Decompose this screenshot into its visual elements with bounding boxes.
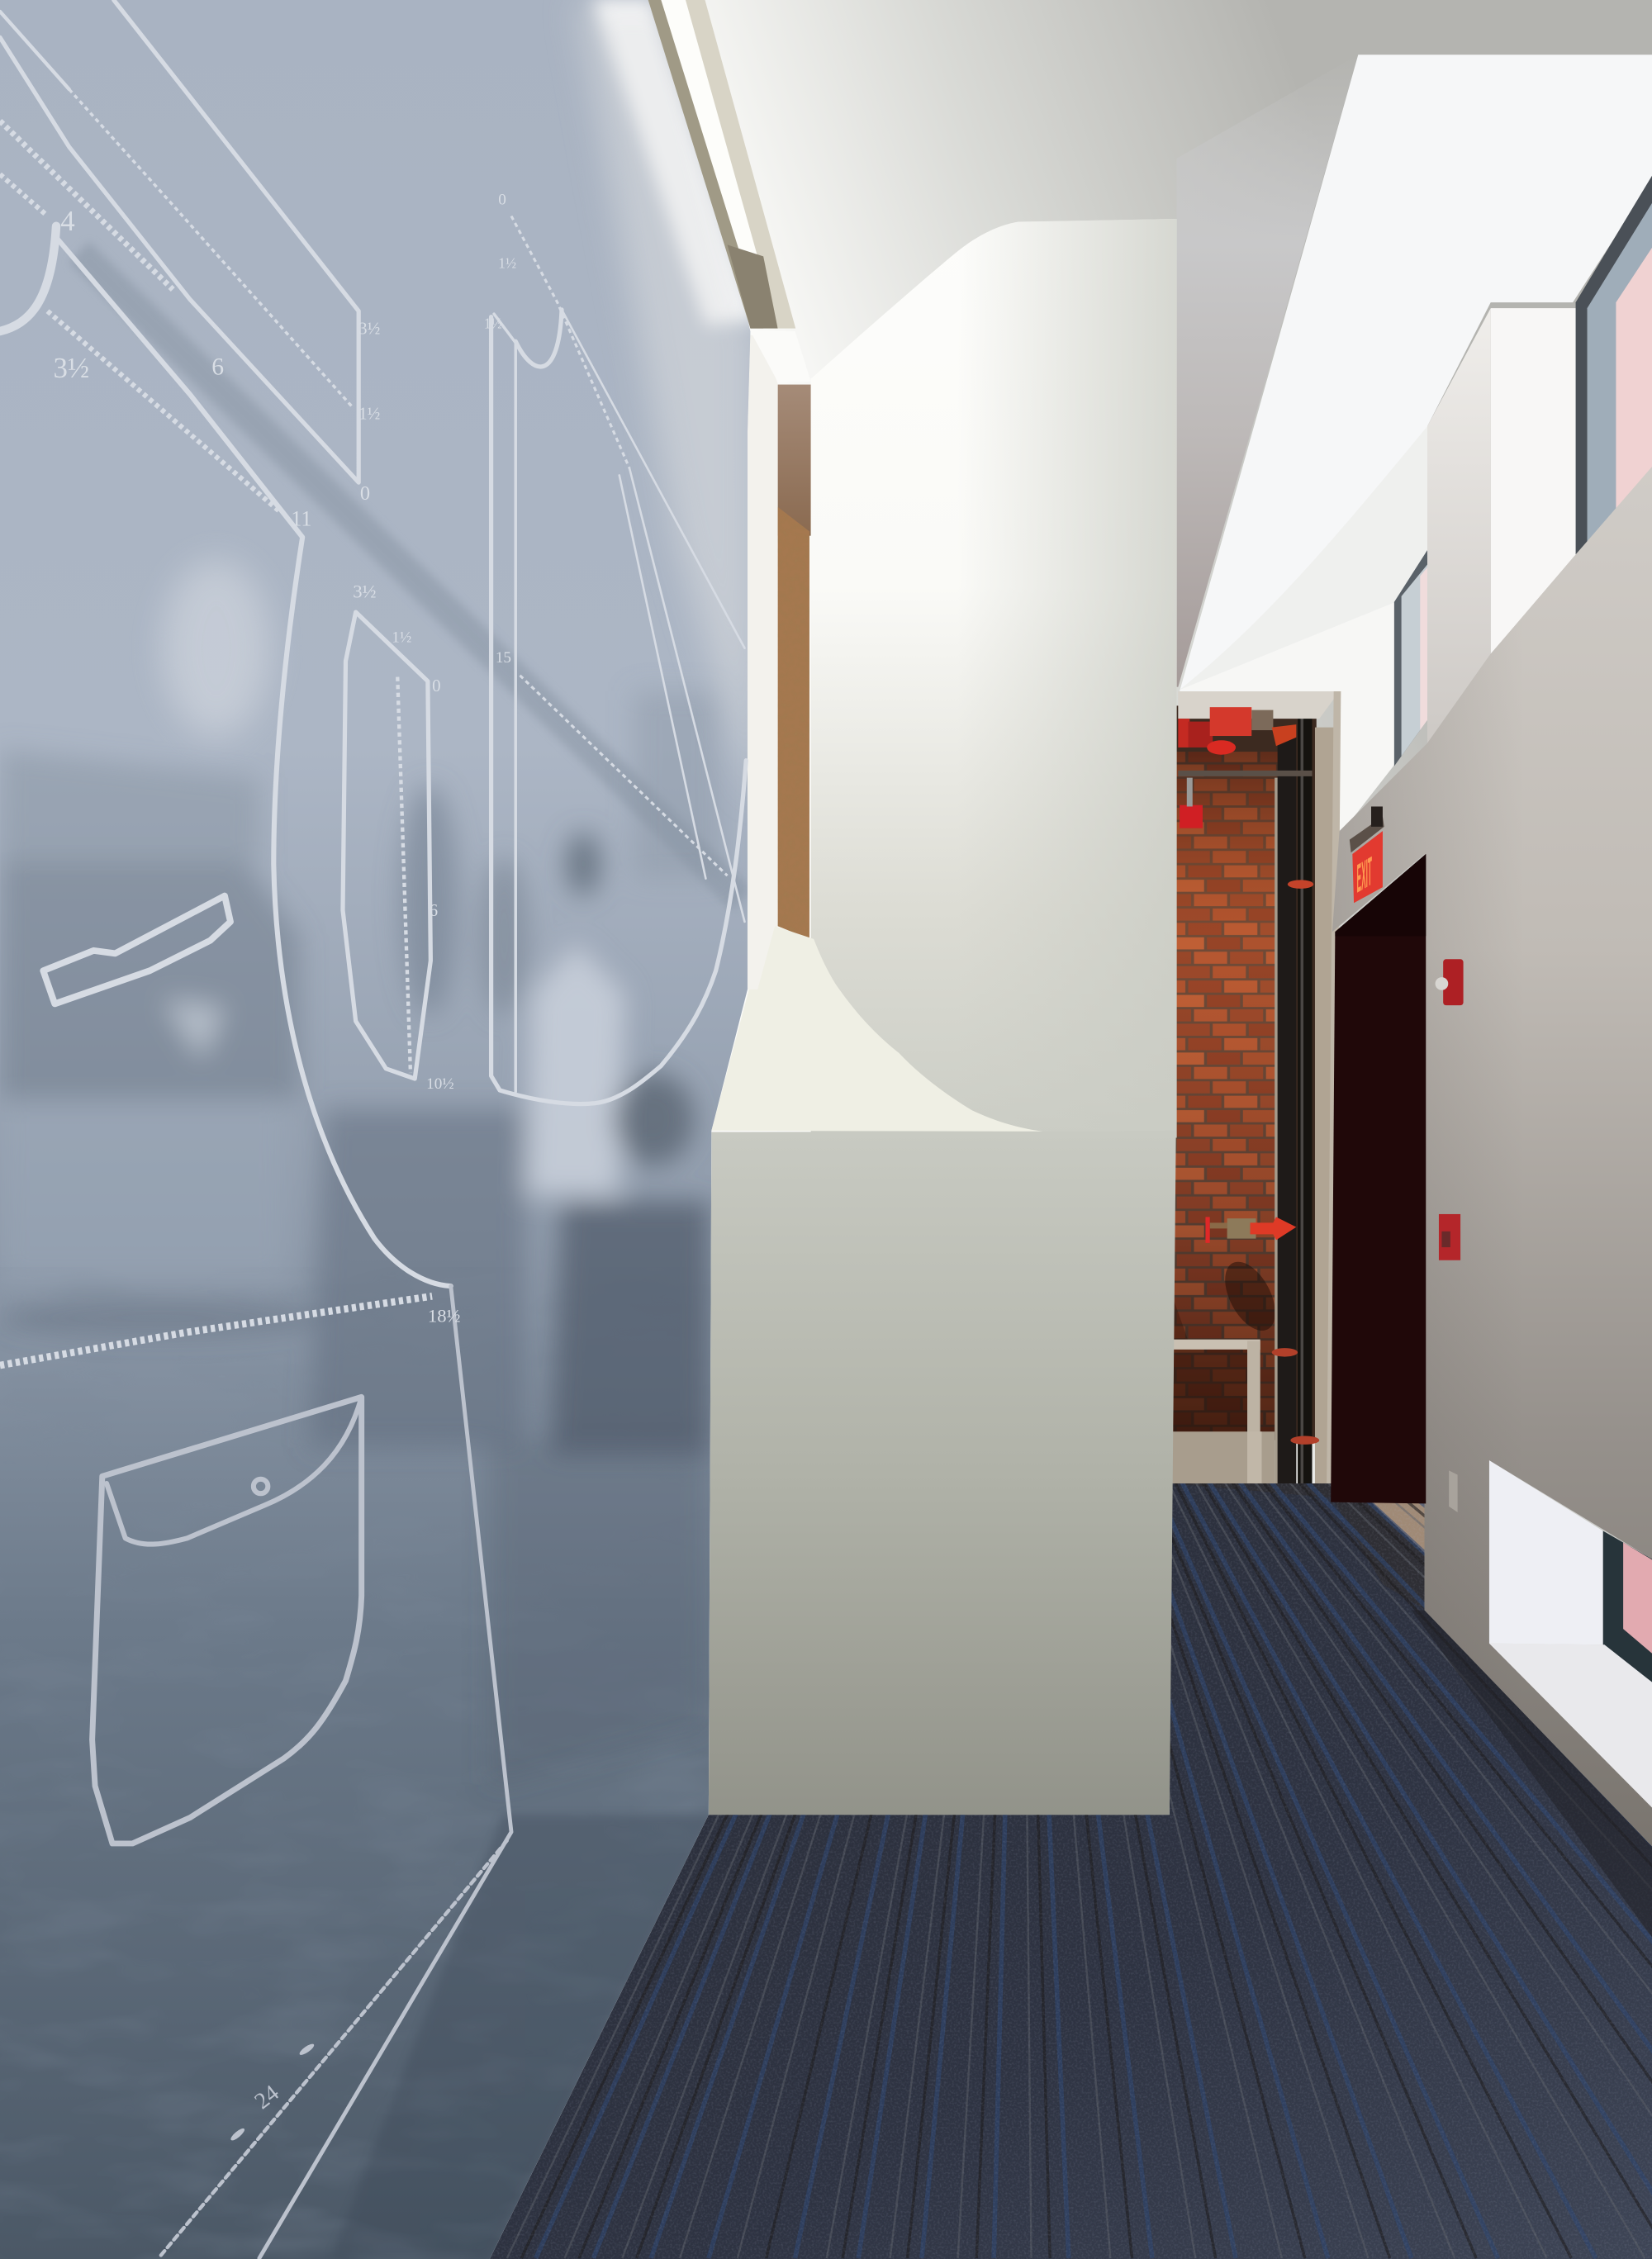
patterned wall mural [0, 0, 756, 2259]
mural pattern lines: 6 [430, 900, 438, 920]
sloped ledge [711, 926, 1042, 1132]
fin panel [748, 331, 811, 989]
carpet floor [490, 1483, 1652, 2259]
mural pattern lines: 0 [360, 482, 370, 505]
mural pattern lines: 3½ [358, 319, 380, 339]
mural pattern lines: 18½ [428, 1306, 461, 1326]
ceiling light fixture [648, 0, 795, 329]
top band [0, 0, 358, 482]
pocket [93, 1397, 362, 1844]
light switch [1449, 1470, 1458, 1512]
exit sign [1350, 806, 1384, 903]
white pillar upper volume [811, 219, 1177, 1138]
dark doorway [1331, 854, 1426, 1503]
photo ghost: workers and machines [0, 691, 720, 1786]
mural pattern lines: 3½ [54, 352, 89, 384]
grey wall [1332, 467, 1652, 1846]
red sprinkler valves [1178, 707, 1319, 1445]
carpet grain [475, 1476, 1652, 2259]
lower box volume [709, 1131, 1176, 1815]
mural pattern lines: 15 [496, 649, 511, 667]
mural pattern lines: 6 [211, 354, 224, 380]
flap piece [43, 896, 230, 1004]
pattern numbers: 4 [60, 205, 75, 237]
exit sign: EXIT [1357, 848, 1372, 902]
middle window [1394, 550, 1427, 766]
mural pattern lines [0, 0, 746, 2258]
mural pattern lines: 1½ [498, 254, 516, 271]
light glow [593, 0, 756, 325]
mottled print texture [188, 2049, 415, 2258]
shoulder and body outline [0, 226, 56, 331]
mural pattern lines: 3½ [353, 581, 377, 602]
mural pattern lines: 0 [432, 676, 441, 695]
brick wall [1172, 705, 1317, 1440]
mural pattern lines: 11 [291, 506, 311, 530]
soffit over back wall [1178, 691, 1341, 1503]
white soffit and window reveals [1180, 55, 1652, 835]
fire pull station [1439, 1214, 1460, 1260]
mural pattern lines: 1½ [484, 316, 502, 332]
mural pattern lines: 1½ [392, 629, 411, 647]
large centre piece [491, 317, 746, 1104]
baseboard and white pipe [1171, 1340, 1275, 1487]
wall sheen [161, 559, 271, 738]
plywood slot [778, 385, 811, 939]
lower window recess [1489, 1460, 1652, 1807]
upper window [1576, 176, 1652, 554]
alarm strobe [1436, 959, 1464, 1005]
photo ghost: roof beam [79, 252, 742, 900]
mural pattern lines: 0 [498, 192, 506, 209]
dark carpet band along wall [1412, 1610, 1652, 1937]
narrow centre piece [343, 612, 430, 1079]
mural pattern lines: 24 [250, 2080, 284, 2114]
wall base shadow [331, 1815, 713, 2258]
mural pattern lines: 10½ [426, 1075, 454, 1093]
mural pattern lines: 1½ [358, 403, 380, 423]
dark vertical pipes [1178, 701, 1312, 1497]
